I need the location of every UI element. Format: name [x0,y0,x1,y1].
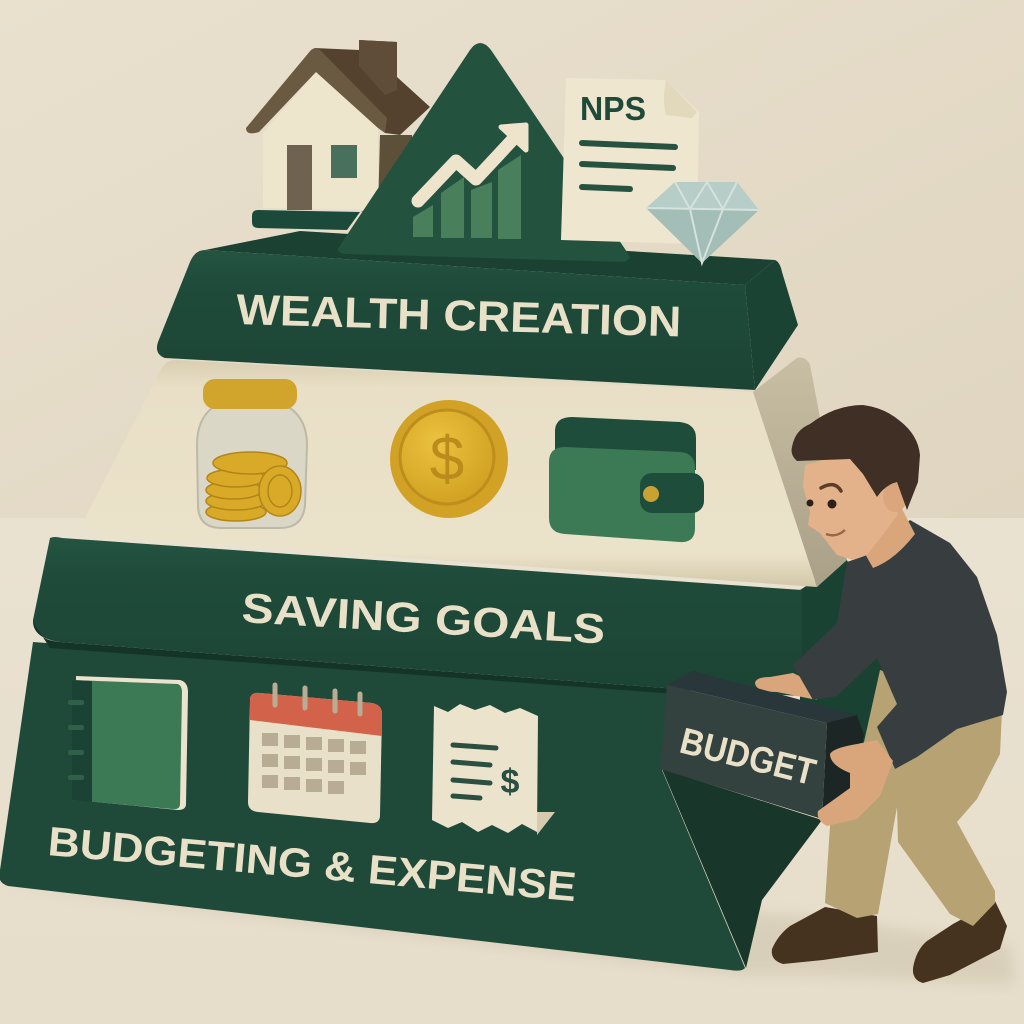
tier 2: saving goals [33,537,802,696]
back hand [755,673,817,700]
tier 3: savings [85,358,847,587]
tier 1: budgeting and expense [0,642,822,971]
neck [860,505,915,568]
icon: calendar [248,685,382,823]
face details [828,500,836,508]
tier 4: wealth creation [157,231,798,390]
ear [883,482,907,512]
hand: front [818,740,893,826]
icon: dollar coin [390,400,508,518]
figure: person lifting block [660,405,1007,983]
background wall [0,0,1024,518]
icon: receipt: $ [501,763,520,801]
trousers [825,670,1002,926]
ground shadow [0,885,1015,985]
NPS label: NPS [580,90,646,127]
icon: house [246,40,430,230]
block: budget: BUDGET [676,720,820,793]
label: budgeting and expense: BUDGETING & EXPENSE [46,818,578,910]
icon: receipt [432,704,555,835]
label: wealth creation: WEALTH CREATION [236,286,682,346]
tier 2: saving goals side [800,560,905,770]
head [803,450,905,560]
sweater [793,520,1007,769]
floor [0,518,1024,1024]
icon: wallet [549,417,704,542]
hair [792,405,920,510]
icon: NPS document [561,78,699,244]
icon: coin jar [197,379,307,528]
icon: green triangle with growth chart [338,43,630,262]
icon: notebook [68,676,188,810]
icon: diamond [646,182,759,263]
icon: dollar coin: $ [430,425,464,494]
label: saving goals: SAVING GOALS [240,584,607,653]
shoes [772,907,878,964]
block: budget [660,671,864,819]
